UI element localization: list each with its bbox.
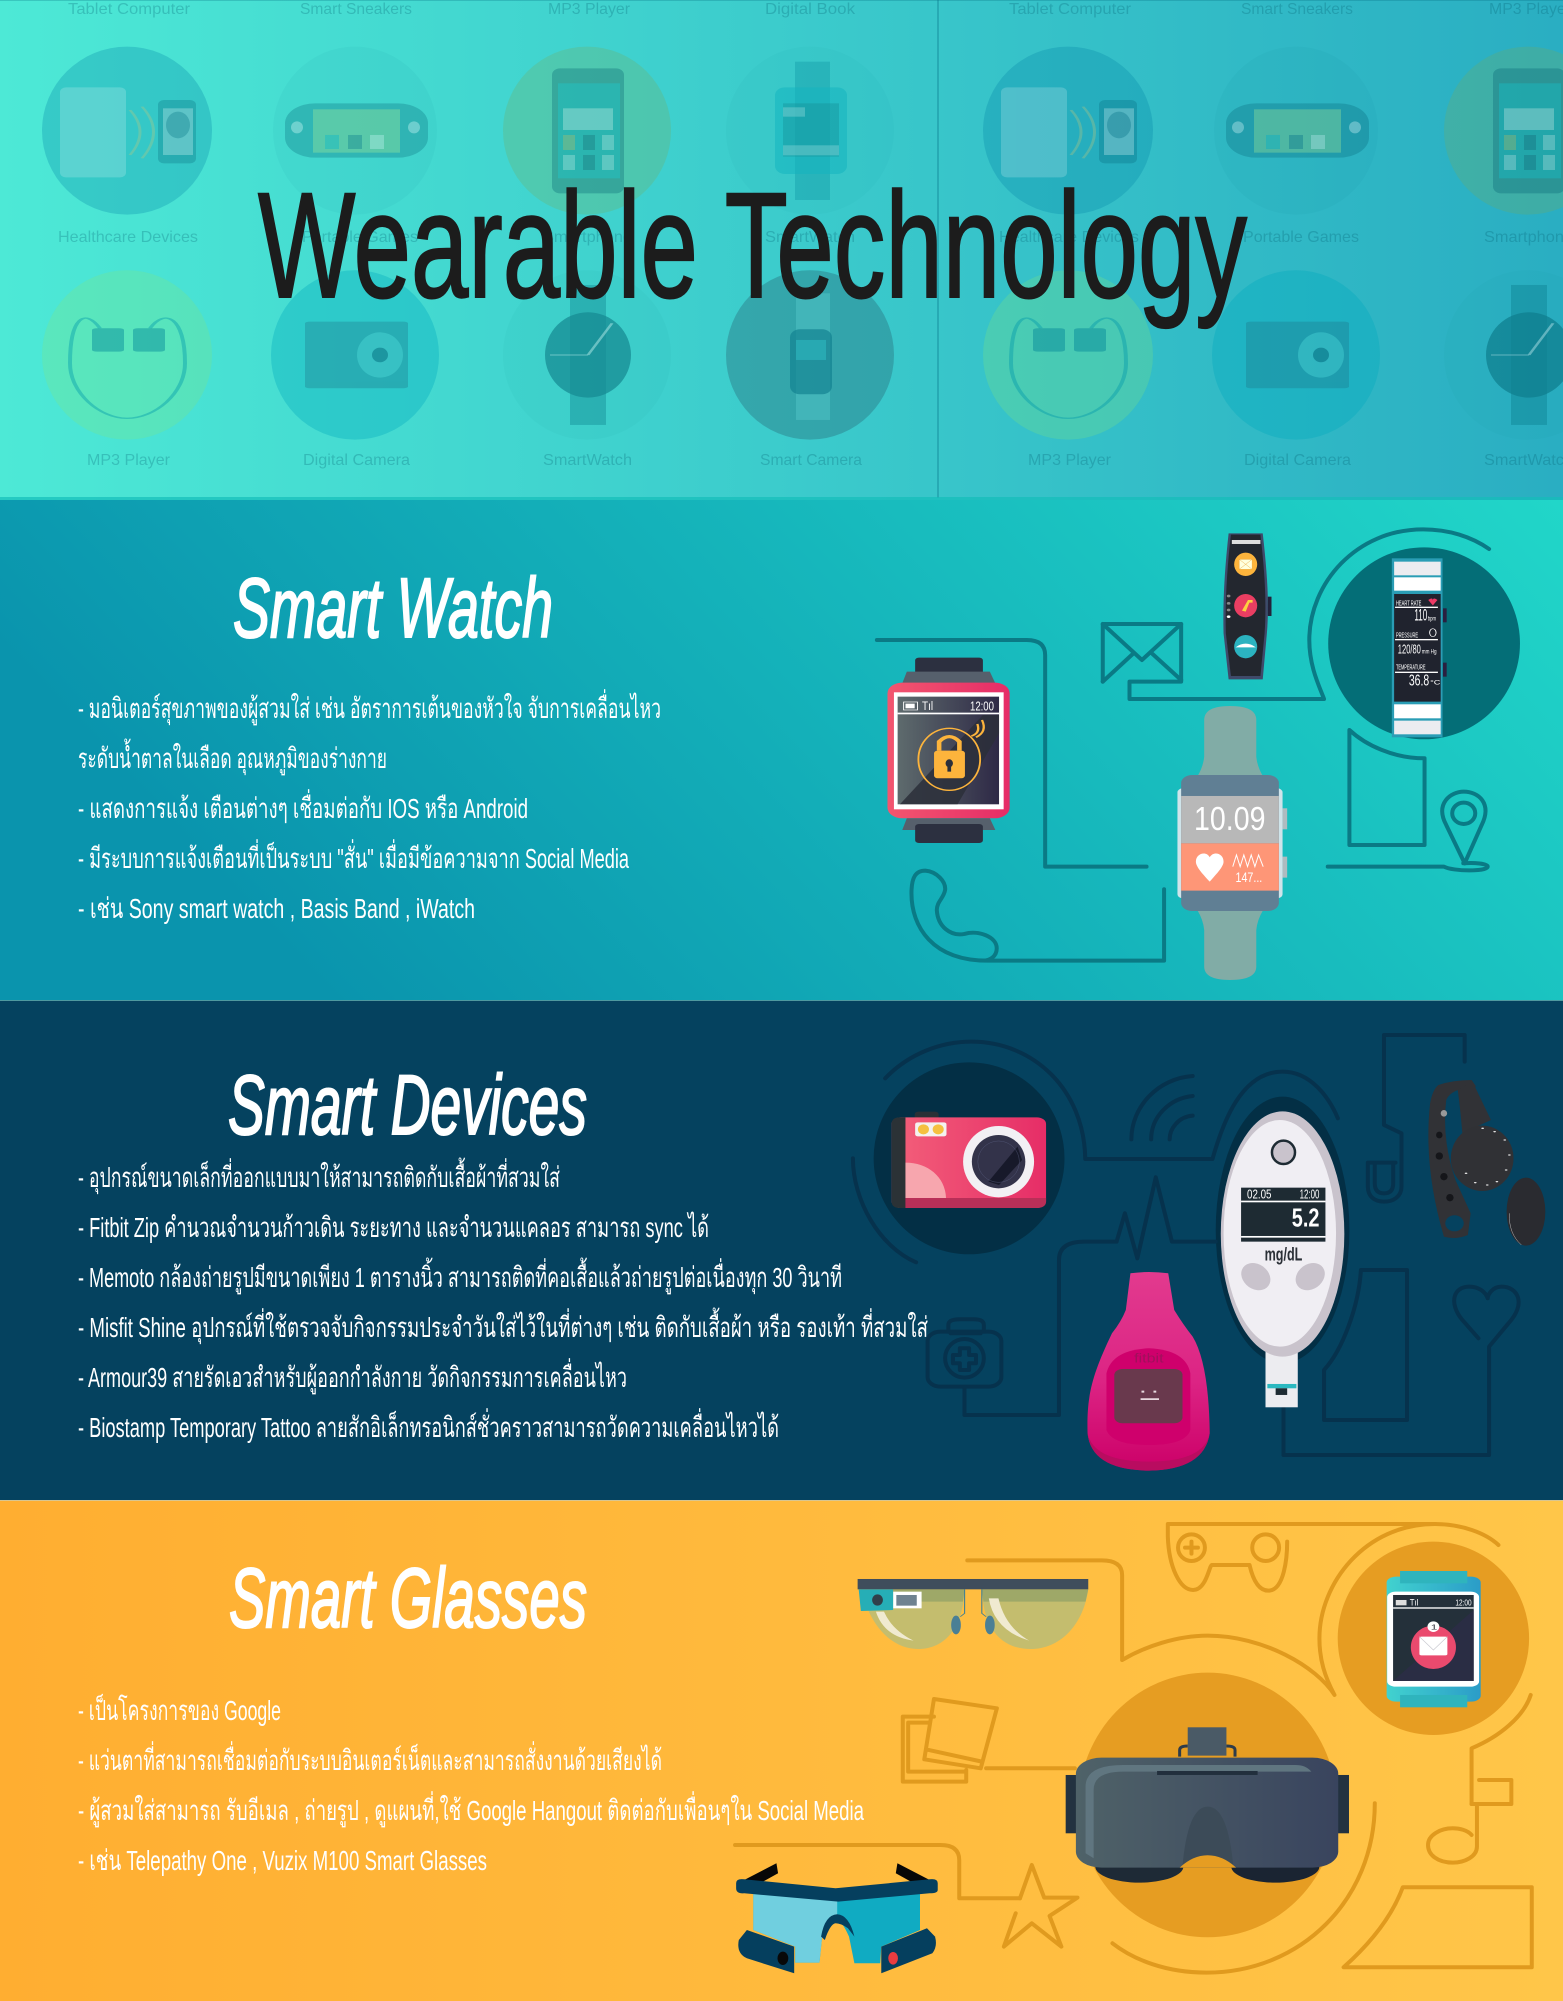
text block: smart watch features: - มีระบบการแจ้งเตือนที่เป็นระบบ "สั่น" เมื่อมีข้อความจาก Social Media — [78, 839, 629, 874]
icon: blue sport glasses — [736, 1863, 938, 1973]
background pattern: device icons: Tablet Computer — [68, 1, 191, 18]
background pattern: device icons: Smart Camera — [760, 452, 862, 469]
text block: smart devices features: - อุปกรณ์ขนาดเล็กที่ออกแบบมาให้สามารถติดกับเสื้อผ้าที่สวมใส่ — [78, 1157, 560, 1195]
background pattern: device icons: Smartphone — [543, 229, 632, 246]
background pattern: device icons: SmartWatch — [543, 452, 632, 469]
icon: dark circle — [1328, 547, 1520, 739]
background pattern: device icons: MP3 Player — [87, 452, 171, 469]
text block: smart watch features: - มอนิเตอร์สุขภาพของผู้สวมใส่ เช่น อัตราการเต้นของหัวใจ จับการเคลื่อนไหว — [78, 689, 661, 726]
icon: pink smartwatch with lock — [887, 658, 1010, 843]
heading: smart devices: Smart Devices — [228, 1058, 587, 1152]
icon: glucose meter: 5.2 — [1292, 1203, 1319, 1232]
background pattern: device icons: Smart Sneakers — [1241, 1, 1353, 18]
icon: health band: HEART RATE — [1396, 599, 1421, 607]
icon: health band: bpm — [1428, 615, 1436, 622]
icon: dark oval — [1216, 1097, 1349, 1363]
icon: grey smartwatch with heart rate: 147... — [1236, 870, 1262, 885]
text block: smart glasses features — [78, 1693, 864, 1876]
background pattern: device icons: Portable Games — [302, 229, 418, 246]
panel: header — [0, 0, 1563, 500]
background pattern: device icons: Portable Games — [1243, 229, 1359, 246]
illustration: smart glasses — [735, 1524, 1532, 1973]
text block: smart watch features: ระดับน้ำตาลในเลือด อุณหภูมิของร่างกาย — [78, 738, 387, 776]
text block: smart devices features: - Memoto กล้องถ่ายรูปมีขนาดเพียง 1 ตารางนิ้ว สามารถติดที่คอเสื้อแล้วถ่ายรูปต่อเนื่องทุก 30 วินาที — [78, 1257, 842, 1295]
heading: smart watch: Smart Watch — [233, 561, 553, 655]
icon: health band: PRESSURE — [1396, 631, 1418, 639]
icon: health band: °C — [1430, 679, 1441, 686]
connector lines and line icons — [735, 1524, 1532, 1973]
background pattern: device icons — [42, 1, 1563, 469]
text block: smart devices features: - Armour39 สายรัดเอวสำหรับผู้ออกกำลังกาย วัดกิจกรรมการเคลื่อนไหว — [78, 1358, 627, 1395]
icon: glucose meter: mg/dL — [1265, 1244, 1303, 1265]
background pattern: device icons: Healthcare Devices — [58, 229, 198, 246]
icon: vr headset — [1066, 1727, 1349, 1883]
icon: teal smartwatch with mail: 12:00 — [1455, 1598, 1472, 1608]
icon: health band — [1392, 558, 1447, 737]
heading: smart glasses: Smart Glasses — [229, 1551, 587, 1645]
panel: smart devices — [0, 1000, 1563, 1500]
icon: pink smartwatch with lock: Tıl — [922, 700, 933, 713]
icon: dark circle — [874, 1062, 1065, 1254]
text block: smart glasses features: - เช่น Telepathy One , Vuzix M100 Smart Glasses — [78, 1845, 487, 1876]
icon: glucose meter: 02.05 — [1247, 1187, 1272, 1202]
background pattern: device icons: MP3 Player — [548, 1, 631, 18]
icon: health band: 36.8 — [1409, 671, 1429, 689]
icon: small circle — [1338, 1542, 1529, 1735]
text block: smart watch features — [78, 689, 661, 924]
text block: smart glasses features: - ผู้สวมใส่สามารถ รับอีเมล , ถ่ายรูป , ดูแผนที่,ใช้ Google Hangout ติดต่อกับเพื่อนๆใน Social Media — [78, 1791, 864, 1828]
text block: smart watch features: - แสดงการแจ้ง เตือนต่างๆ เชื่อมต่อกับ IOS หรือ Android — [78, 789, 528, 824]
connector lines and line icons — [877, 529, 1489, 961]
connector lines and line icons — [853, 1035, 1519, 1455]
icon: health band: 110 — [1414, 607, 1427, 625]
icon: big circle — [1079, 1673, 1337, 1937]
icon: grey smartwatch with heart rate — [1177, 706, 1287, 980]
text block: smart glasses features: - แว่นตาที่สามารถเชื่อมต่อกับระบบอินเตอร์เน็ตและสามารถสั่งงานด้วยเสียงได้ — [78, 1741, 662, 1776]
background pattern: device icons: Smart Sneakers — [300, 1, 412, 18]
background pattern: device icons: Digital Camera — [1244, 452, 1351, 469]
text block: smart devices features — [78, 1157, 928, 1443]
background pattern: device icons: Healthcare Devices — [999, 229, 1139, 246]
icon: teal smartwatch with mail — [1387, 1571, 1481, 1707]
background pattern: device icons: Digital Book — [765, 1, 856, 18]
icon: google glass — [858, 1579, 1088, 1649]
text block: smart glasses features: - เป็นโครงการของ Google — [78, 1693, 281, 1726]
icon: fitbit zip — [1087, 1272, 1210, 1471]
icon: glucose meter: 12:00 — [1300, 1187, 1319, 1202]
panel: smart glasses — [0, 1500, 1563, 2001]
icon: glucose meter — [1221, 1111, 1344, 1407]
background pattern: device icons: MP3 Player — [1028, 452, 1112, 469]
icon: misfit shine band — [1428, 1080, 1545, 1246]
icon: pink camera — [892, 1112, 1046, 1208]
background pattern: device icons: Digital Camera — [303, 452, 410, 469]
text block: smart devices features: - Biostamp Temporary Tattoo ลายสักอิเล็กทรอนิกส์ชั่วคราวสามารถวัดความเคลื่อนไหวได้ — [78, 1408, 779, 1443]
icon: teal smartwatch with mail: 1 — [1431, 1623, 1437, 1632]
icon: pink smartwatch with lock: 12:00 — [970, 699, 994, 714]
background pattern: device icons: SmartWatch — [765, 229, 855, 246]
panel: smart watch — [0, 500, 1563, 1000]
text block: smart watch features: - เช่น Sony smart watch , Basis Band , iWatch — [78, 893, 475, 924]
text block: smart devices features: - Misfit Shine อุปกรณ์ที่ใช้ตรวจจับกิจกรรมประจำวันใส่ไว้ในที่ต่างๆ เช่น ติดกับเสื้อผ้า หรือ รองเท้า ที่สวมใส่ — [78, 1307, 928, 1345]
icon: health band: mm Hg — [1422, 648, 1437, 655]
illustration: smart devices — [853, 1035, 1545, 1471]
icon: health band: 120/80 — [1398, 642, 1421, 657]
text block: smart devices features: - Fitbit Zip คำนวณจำนวนก้าวเดิน ระยะทาง และจำนวนแคลอร สามารถ sync ได้ — [78, 1212, 709, 1243]
icon: teal smartwatch with mail: Tıl — [1410, 1597, 1418, 1608]
icon: fitbit zip: fitbit — [1134, 1351, 1164, 1366]
illustration: smart watch devices — [877, 529, 1520, 980]
icon: grey smartwatch with heart rate: 10.09 — [1194, 800, 1266, 837]
icon: health band: TEMPERATURE — [1396, 663, 1426, 671]
background pattern: device icons: Tablet Computer — [1009, 1, 1132, 18]
icon: fitness band — [1223, 533, 1271, 679]
